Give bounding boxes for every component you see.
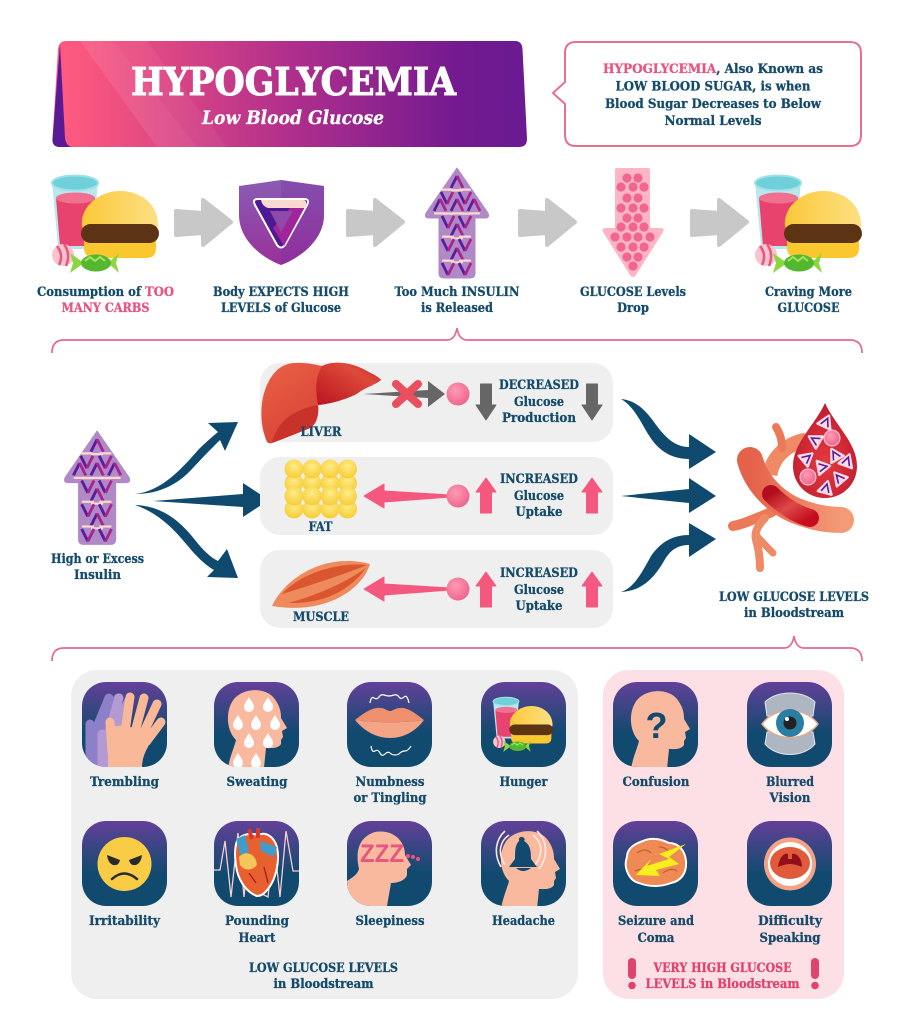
- title banner: [52, 41, 527, 147]
- label: LOW GLUCOSE LEVELS: [719, 589, 869, 604]
- icon: up arrow left: [476, 572, 496, 607]
- step label: Body EXPECTS HIGH: [213, 284, 349, 299]
- icon: exclamation right: [811, 958, 819, 989]
- icon: glucose down arrow: [602, 168, 664, 277]
- text: decreased glucose production: Production: [502, 410, 576, 425]
- arrow: step 1 to 2: [176, 200, 231, 245]
- icon: food: [755, 176, 862, 273]
- icon: [214, 682, 299, 768]
- label: High or Excess: [51, 551, 144, 566]
- symptom: irritability: [82, 821, 167, 928]
- step 3: insulin released: [394, 168, 520, 315]
- step 4: glucose levels drop: Drop: [617, 300, 649, 315]
- icon: insulin arrow: [425, 168, 489, 278]
- arrow: insulin to muscle: [135, 505, 238, 578]
- arrow: step 2 to 3: [348, 200, 403, 245]
- label: Numbness: [356, 774, 424, 789]
- label: Irritability: [89, 913, 161, 928]
- label: Confusion: [622, 774, 690, 789]
- label: Heart: [238, 930, 276, 945]
- arrow: insulin to fat: [153, 483, 269, 517]
- panel: fat: [260, 457, 613, 535]
- illustration: blood vessel and blood drop: [719, 403, 869, 620]
- panel: severe symptoms: [603, 670, 844, 999]
- footer label: VERY HIGH GLUCOSE: [653, 960, 792, 975]
- text: decreased glucose production: DECREASED: [499, 377, 579, 392]
- footer label: LEVELS in Bloodstream: [646, 976, 800, 991]
- arrow: step 4 to 5: [692, 200, 747, 245]
- text: increased glucose uptake: Uptake: [516, 504, 562, 519]
- icon: [747, 682, 832, 767]
- label: Seizure and: [618, 913, 694, 928]
- label: Sleepiness: [356, 913, 424, 928]
- label: Difficulty: [758, 913, 823, 928]
- text: increased glucose uptake: [500, 565, 578, 613]
- icon: [613, 821, 698, 906]
- icon: fat cells: [284, 460, 357, 518]
- step 1: too many carbs: [37, 176, 174, 315]
- icon: up arrow left: [476, 478, 496, 513]
- callout: definition: HYPOGLYCEMIA, Also Known as: [603, 61, 823, 76]
- icon: [347, 682, 432, 767]
- text: increased glucose uptake: INCREASED: [500, 471, 578, 486]
- arrow: blocked glucose production: [363, 381, 470, 407]
- label: MUSCLE: [293, 609, 349, 624]
- label: Hunger: [500, 774, 548, 789]
- step label: Consumption of TOO: [37, 284, 174, 299]
- callout: definition: [553, 42, 861, 146]
- insulin source: [51, 431, 144, 582]
- symptom: confusion: [613, 682, 698, 789]
- icon: up arrow right: [582, 478, 602, 513]
- panel: liver: [260, 363, 613, 443]
- icon: down arrow right: [582, 384, 602, 420]
- text: increased glucose uptake: Uptake: [516, 598, 562, 613]
- arrow: glucose into muscle: [364, 577, 470, 601]
- label: Trembling: [90, 774, 159, 789]
- symptom: hunger: [481, 682, 566, 789]
- blood vessel: [733, 427, 841, 568]
- callout: definition: Normal Levels: [664, 113, 762, 128]
- label: Coma: [638, 930, 674, 945]
- label: Pounding: [225, 913, 289, 928]
- label: FAT: [308, 519, 333, 534]
- icon: [214, 821, 299, 906]
- subtitle: Low Blood Glucose: [201, 107, 384, 129]
- text: increased glucose uptake: Glucose: [514, 488, 564, 503]
- bracket: effects: [52, 636, 862, 661]
- arrow: fat to bloodstream: [621, 478, 716, 513]
- illustration: blood vessel and blood drop: in Bloodstream: [744, 605, 845, 620]
- symptom: numbness or tingling: [347, 682, 432, 805]
- icon: exclamation left: [628, 958, 636, 989]
- step 2: body expects high glucose: LEVELS of Glucose: [221, 300, 341, 315]
- icon: [747, 821, 832, 906]
- icon: muscle: [272, 561, 370, 608]
- symptom: sweating: [214, 682, 299, 789]
- arrow: muscle to bloodstream: [621, 523, 716, 592]
- step label: Craving More: [765, 284, 852, 299]
- symptom: sleepiness: [347, 821, 432, 928]
- step 5: craving more glucose: [755, 176, 862, 315]
- panel: muscle: [260, 550, 613, 628]
- panel: low glucose symptoms: [71, 670, 578, 999]
- label: [225, 913, 289, 945]
- arrow: insulin to liver: [135, 422, 238, 494]
- heading: HYPOGLYCEMIA: [131, 59, 456, 104]
- label: [758, 913, 823, 945]
- footer label: [646, 960, 800, 991]
- symptom: headache: [481, 821, 566, 928]
- text: increased glucose uptake: Glucose: [514, 582, 564, 597]
- icon: ZZZ: [360, 840, 404, 868]
- icon: ?: [646, 705, 668, 746]
- icon: food: [52, 176, 159, 273]
- symptom: blurred vision: [747, 682, 832, 805]
- callout: definition: Blood Sugar Decreases to Below: [605, 96, 822, 111]
- icon: down arrow left: [476, 384, 496, 420]
- text: increased glucose uptake: INCREASED: [500, 565, 578, 580]
- label: [766, 774, 814, 805]
- label: Blurred: [766, 774, 814, 789]
- icon: shield: [239, 180, 324, 265]
- step 2: body expects high glucose: [213, 180, 349, 315]
- insulin source: Insulin: [74, 567, 121, 582]
- text: increased glucose uptake: [500, 471, 578, 519]
- step 5: craving more glucose: GLUCOSE: [778, 300, 840, 315]
- label: Speaking: [760, 930, 821, 945]
- label: LIVER: [300, 424, 342, 439]
- icon: up arrow right: [582, 572, 602, 607]
- text: decreased glucose production: [499, 377, 579, 425]
- step label: Too Much INSULIN: [394, 284, 520, 299]
- label: or Tingling: [354, 790, 427, 805]
- label: Headache: [492, 913, 555, 928]
- footer label: [249, 960, 398, 991]
- symptom: difficulty speaking: [747, 821, 832, 945]
- symptom: pounding heart: [214, 821, 299, 945]
- bracket: process: [52, 328, 862, 353]
- blood drop: [793, 403, 857, 498]
- arrow: liver to bloodstream: [621, 399, 716, 469]
- callout: definition: LOW BLOOD SUGAR, is when: [616, 78, 810, 94]
- arrow: glucose into fat: [364, 484, 470, 508]
- step 1: too many carbs: MANY CARBS: [62, 300, 150, 315]
- icon: [481, 821, 566, 909]
- step 4: glucose levels drop: [580, 168, 686, 315]
- icon: [481, 682, 566, 767]
- footer label: LOW GLUCOSE LEVELS: [249, 960, 398, 975]
- symptom: seizure and coma: [613, 821, 698, 945]
- footer label: in Bloodstream: [274, 976, 374, 991]
- label: Sweating: [226, 774, 288, 789]
- step label: GLUCOSE Levels: [580, 284, 686, 299]
- icon: liver: [261, 363, 381, 443]
- icon: insulin arrow: [65, 431, 130, 544]
- arrow: step 3 to 4: [520, 200, 575, 245]
- step 3: insulin released: is Released: [421, 300, 493, 315]
- label: [618, 913, 694, 945]
- text: decreased glucose production: Glucose: [514, 394, 564, 409]
- label: Vision: [769, 790, 810, 805]
- label: [354, 774, 427, 805]
- icon: [82, 682, 167, 770]
- icon: [82, 821, 167, 906]
- symptom: trembling: [82, 682, 167, 789]
